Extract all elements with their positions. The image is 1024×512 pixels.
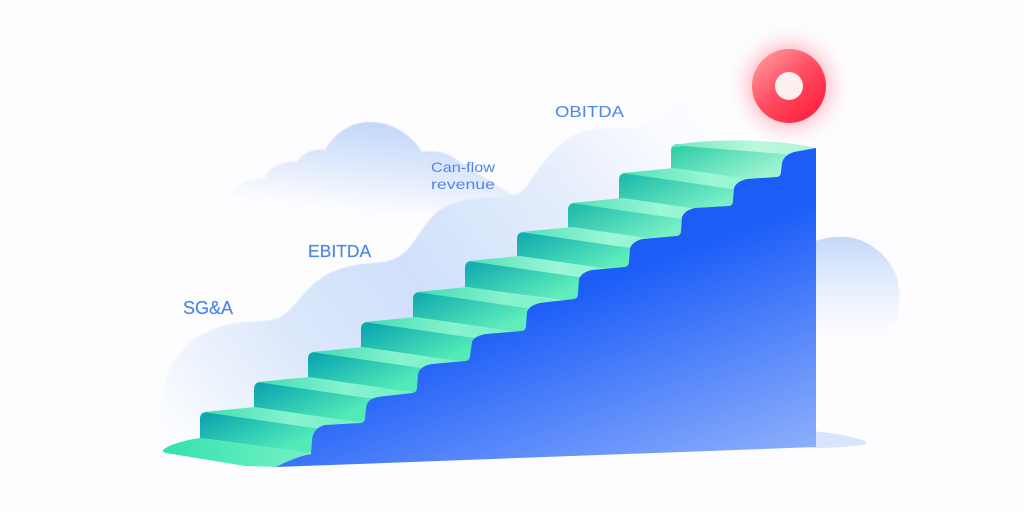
label: EBITDA: EBITDA <box>308 241 372 261</box>
background cloud: upper left <box>228 122 520 215</box>
step 10 <box>671 144 816 185</box>
background cloud: right <box>810 237 899 335</box>
top tread <box>672 140 816 156</box>
step 2 <box>254 377 418 423</box>
step 9 <box>619 168 783 214</box>
step 4 <box>361 317 525 363</box>
label: cash flow revenue <box>431 159 496 192</box>
red target marker <box>749 46 829 126</box>
step 6 <box>465 256 629 302</box>
step 7 <box>517 227 681 273</box>
marker centre <box>775 72 803 100</box>
bottom tread <box>163 438 312 467</box>
label: SG&A: SG&A <box>183 298 233 318</box>
label: OBITDA: OBITDA <box>555 104 625 121</box>
label: cash flow revenue: Can-flow <box>431 159 496 175</box>
ground shadow <box>812 431 866 448</box>
marker glow <box>749 46 829 126</box>
label: cash flow revenue: revenue <box>431 176 495 192</box>
background hills behind stairs <box>160 100 720 440</box>
step 3 <box>308 347 472 393</box>
marker disc <box>752 49 826 123</box>
blue stair body <box>276 148 816 467</box>
step 5 <box>413 287 577 333</box>
step 8 <box>568 198 732 244</box>
staircase <box>163 140 816 467</box>
step 1 <box>200 407 364 453</box>
